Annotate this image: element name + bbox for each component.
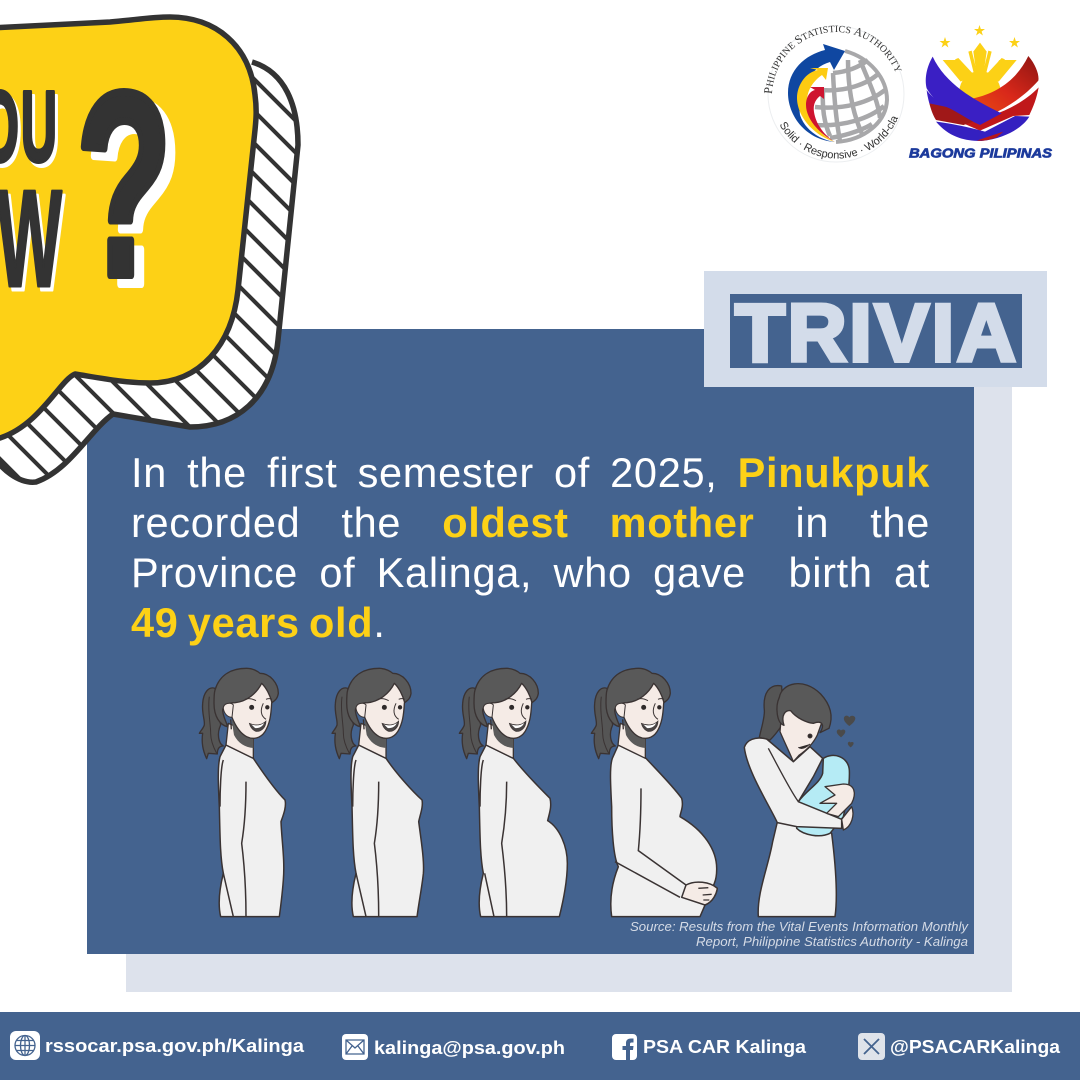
- PSA name text: PHILIPPINE STATISTICS AUTHORITY: [764, 26, 902, 94]
- body text: [131, 449, 930, 646]
- illustration: stage 3 woman: [459, 668, 567, 917]
- footer: facebook: PSA CAR Kalinga: [643, 1036, 807, 1057]
- question mark: ?: [86, 46, 182, 340]
- icon: globe: [10, 1031, 40, 1060]
- sun: [943, 43, 1017, 112]
- footer: facebook: [612, 1034, 807, 1060]
- source note: [630, 919, 970, 949]
- yellow swoosh arrow: [797, 68, 835, 142]
- yellow bubble: [0, 17, 256, 440]
- trivia badge: [704, 271, 1047, 387]
- red band lower right: [963, 87, 1039, 131]
- footer: X: @PSACARKalinga: [890, 1036, 1061, 1057]
- hearts: [837, 716, 855, 747]
- blue left tip: [927, 90, 953, 108]
- Bagong Pilipinas logo: [909, 25, 1052, 160]
- panel shadow: [126, 380, 1012, 992]
- torso and arm: [744, 738, 842, 828]
- illustration: mother holding baby: [744, 684, 855, 917]
- footer: X: [858, 1033, 1061, 1060]
- body text: In the first semester of 2025, Pinukpuk: [131, 449, 930, 496]
- question mark: ?: [76, 37, 172, 331]
- stars: [939, 25, 1020, 48]
- icon: envelope: [342, 1034, 368, 1060]
- speech bubble: [0, 14, 301, 485]
- striped bubble backing: [0, 59, 301, 485]
- heading plate: [730, 294, 1022, 368]
- heading text: TRIVIA: [735, 288, 1016, 379]
- heading: did you know: [0, 70, 65, 320]
- illustration: stage 2 woman: [332, 668, 424, 917]
- dress: [758, 820, 836, 917]
- baby: [797, 755, 849, 836]
- icon: facebook: [612, 1034, 637, 1060]
- illustration: stage 1 woman: [199, 668, 285, 917]
- source note: Report, Philippine Statistics Authority - Kalinga: [696, 934, 968, 949]
- ponytail: [759, 686, 783, 740]
- body text: Province of Kalinga, who gave birth at: [131, 549, 930, 596]
- hair: [777, 684, 831, 733]
- main blue panel: [87, 329, 974, 954]
- hands: [820, 784, 854, 817]
- footer: website: rssocar.psa.gov.ph/Kalinga: [45, 1035, 305, 1056]
- blue bowl: [936, 116, 1029, 141]
- source note: Source: Results from the Vital Events Information Monthly: [630, 919, 970, 934]
- red band lower left: [929, 103, 973, 125]
- body text: recorded the oldest mother in the: [131, 499, 930, 546]
- body text: 49 years old.: [131, 599, 386, 646]
- blue swoosh arrow: [788, 44, 845, 142]
- footer: website: [10, 1031, 305, 1060]
- face and neck: [780, 708, 823, 762]
- logo name: BAGONG PILIPINAS: [909, 146, 1052, 160]
- PSA logo: [764, 26, 904, 162]
- illustration: stage 4 woman, full term: [591, 668, 717, 917]
- footer: email: kalinga@psa.gov.ph: [374, 1037, 565, 1058]
- red band upper right: [953, 56, 1039, 125]
- TRIVIA heading: [730, 288, 1022, 379]
- globe: [813, 51, 887, 142]
- blue band: [926, 57, 1002, 125]
- footer bar: [0, 1012, 1080, 1080]
- footer: email: [342, 1034, 565, 1060]
- icon: X: [858, 1033, 885, 1060]
- red swoosh arrow: [806, 87, 835, 142]
